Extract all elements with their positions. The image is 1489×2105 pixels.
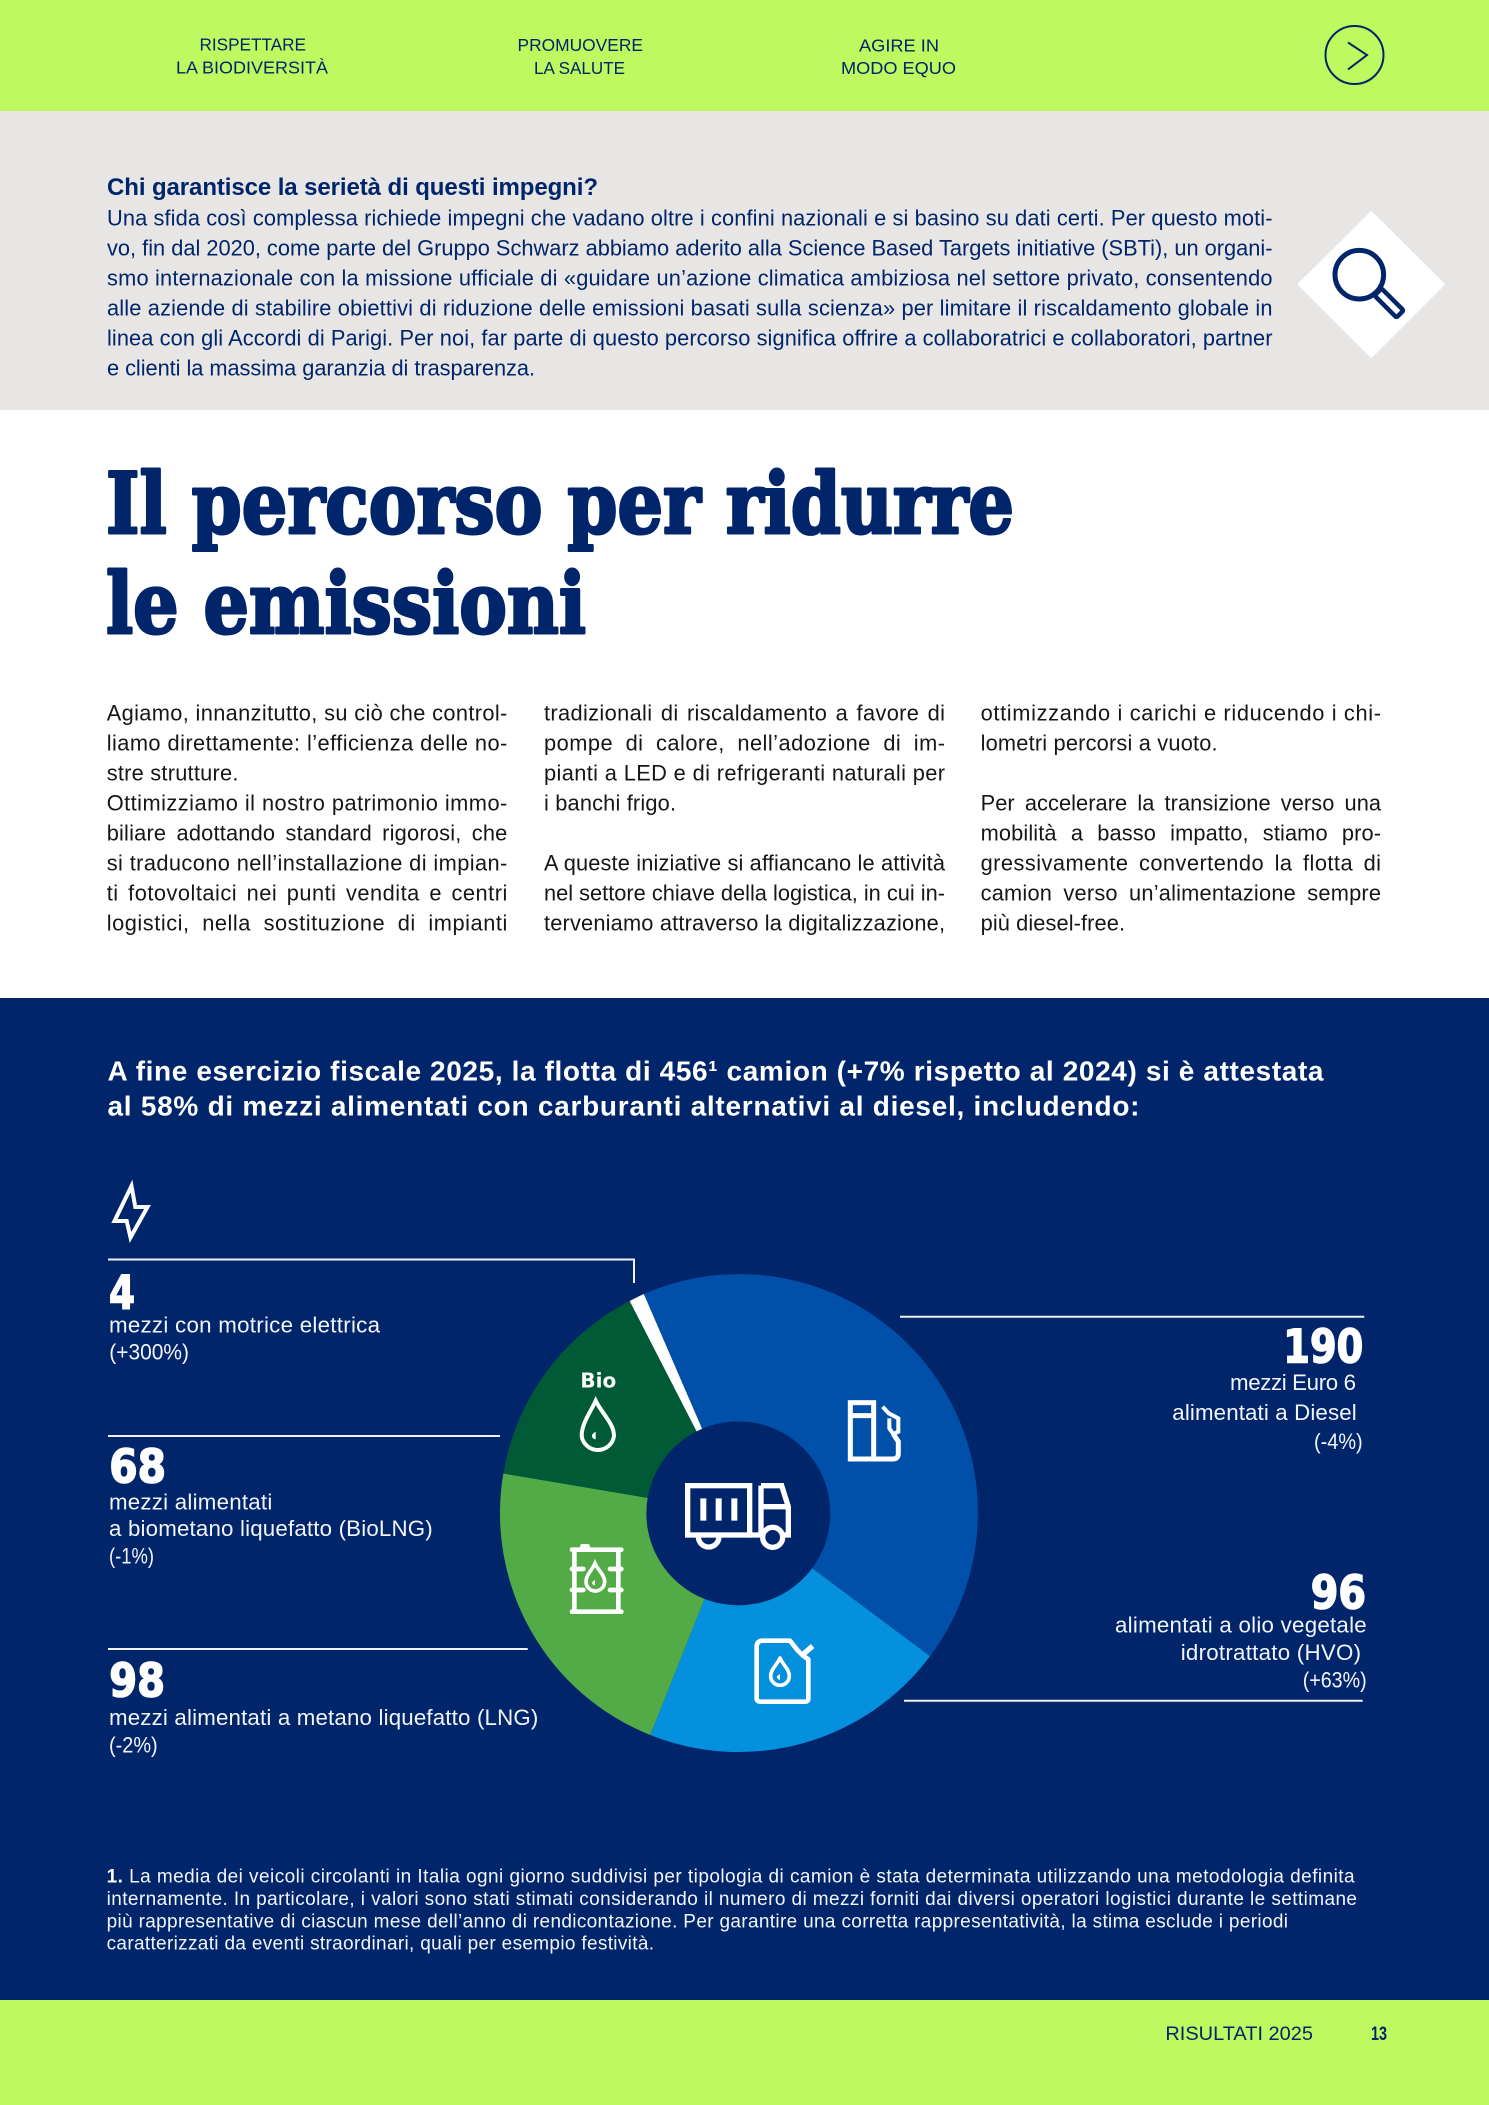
icon: truck [688, 1486, 788, 1547]
panel body text: linea con gli Accordi di Parigi. Per noi, far parte di questo percorso significa offrire a collaboratrici e collaboratori, partner [107, 326, 1272, 351]
text column 3: ottimizzando i carichi e riducendo i chi- [981, 701, 1381, 726]
panel body text: smo internazionale con la missione ufficiale di «guidare un’azione climatica ambiziosa nel settore privato, consentendo [107, 266, 1272, 291]
text column 2: terveniamo attraverso la digitalizzazione, [544, 910, 945, 935]
nav item: promuovere la salute [518, 35, 643, 78]
callout: BioLNG trucks: a biometano liquefatto (BioLNG) [109, 1516, 433, 1541]
segment: diesel Euro 6 [644, 1274, 978, 1656]
text column 1: ti fotovoltaici nei punti vendita e centri [107, 880, 507, 905]
text column 1: biliare adottando standard rigorosi, che [107, 820, 507, 845]
callout: electric trucks: (+300%) [109, 1339, 189, 1364]
text column 3: camion verso un’alimentazione sempre [981, 880, 1381, 905]
callout: HVO trucks [904, 1565, 1367, 1701]
nav item: rispettare la biodiversità: LA BIODIVERSITÀ [176, 58, 328, 78]
callout: BioLNG trucks [108, 1436, 500, 1568]
nav item: rispettare la biodiversità: RISPETTARE [200, 35, 306, 55]
callout: BioLNG trucks: mezzi alimentati [109, 1489, 272, 1514]
panel heading: Chi garantisce la serietà di questi impegni? [107, 174, 598, 201]
text column 1: si traducono nell’installazione di impian- [107, 850, 507, 875]
nav item: agire in modo equo [841, 36, 956, 78]
text column 3: gressivamente convertendo la flotta di [981, 850, 1381, 875]
text column 1: stre strutture. [107, 760, 238, 785]
segment: BioLNG [503, 1301, 739, 1513]
callout: electric trucks: mezzi con motrice elettrica [109, 1313, 381, 1338]
panel body text: Una sfida così complessa richiede impegni che vadano oltre i confini nazionali e si basino su dati certi. Per questo moti- [107, 206, 1272, 231]
icon: lightning bolt [114, 1186, 148, 1238]
footnote: internamente. In particolare, i valori sono stati stimati considerando il numero di mezzi forniti dai diversi operatori logistici durante le settimane [107, 1889, 1357, 1910]
text column 2: pompe di calore, nell’adozione di im- [544, 730, 945, 756]
text column 1: Ottimizziamo il nostro patrimonio immo- [107, 790, 507, 815]
callout: Euro 6 diesel trucks: alimentati a Diesel [1172, 1400, 1357, 1425]
footer label: RISULTATI 2025 [1165, 2024, 1313, 2045]
callout: HVO trucks: alimentati a olio vegetale [1115, 1613, 1367, 1638]
nav item: promuovere la salute: PROMUOVERE [518, 35, 643, 55]
nav item: rispettare la biodiversità [176, 35, 328, 78]
callout: LNG trucks: (-2%) [109, 1733, 158, 1758]
donut hole [646, 1421, 830, 1605]
panel body text: vo, fin dal 2020, come parte del Gruppo Schwarz abbiamo aderito alla Science Based Targets initiative (SBTi), un organi- [107, 236, 1272, 261]
text column 1: logistici, nella sostituzione di impianti [107, 910, 507, 935]
fleet heading: al 58% di mezzi alimentati con carburanti alternativi al diesel, includendo: [108, 1090, 1140, 1122]
panel body text [107, 206, 1272, 381]
panel body text: alle aziende di stabilire obiettivi di riduzione delle emissioni basati sulla scienza» per limitare il riscaldamento globale in [107, 296, 1272, 321]
fleet heading: A fine esercizio fiscale 2025, la flotta di 456¹ camion (+7% rispetto al 2024) si è attestata [108, 1056, 1324, 1086]
text column 2: A queste iniziative si affiancano le attività [544, 850, 946, 875]
icon: oil barrel [572, 1546, 621, 1612]
callout: LNG trucks: 98 [109, 1654, 165, 1708]
panel body text: e clienti la massima garanzia di trasparenza. [107, 356, 535, 381]
callout: LNG trucks [108, 1649, 538, 1758]
text column 2: tradizionali di riscaldamento a favore di [544, 701, 945, 726]
footer band [0, 2000, 1489, 2105]
panel: who guarantees the commitments [0, 111, 1489, 410]
text column 1: Agiamo, innanzitutto, su ciò che control- [107, 701, 507, 726]
text column 2: i banchi frigo. [544, 790, 676, 815]
text column 3 [981, 701, 1382, 935]
nav item: promuovere la salute: LA SALUTE [534, 58, 625, 78]
text column 1 [107, 701, 507, 935]
nav item: agire in modo equo: MODO EQUO [841, 58, 956, 78]
footnote: 1. La media dei veicoli circolanti in Italia ogni giorno suddivisi per tipologia di camion è stata determinata utilizzando una metodologia definita [107, 1866, 1355, 1887]
callout: Euro 6 diesel trucks: 190 [1283, 1320, 1363, 1374]
callout: HVO trucks: idrotrattato (HVO) [1181, 1640, 1361, 1665]
text column 3: Per accelerare la transizione verso una [981, 790, 1382, 815]
text column 1: liamo direttamente: l’efficienza delle no- [107, 730, 507, 756]
footnote: più rappresentative di ciascun mese dell’anno di rendicontazione. Per garantire una corretta rappresentatività, la stima esclude i periodi [107, 1912, 1288, 1932]
icon: magnifying glass on white diamond [1297, 211, 1445, 358]
icon: bio drop [580, 1368, 616, 1450]
fleet heading [108, 1056, 1324, 1122]
callout: Euro 6 diesel trucks [900, 1317, 1364, 1454]
callout: LNG trucks: mezzi alimentati a metano liquefatto (LNG) [109, 1705, 538, 1730]
icon: bio drop: Bio [580, 1368, 616, 1392]
callout: Euro 6 diesel trucks: mezzi Euro 6 [1230, 1370, 1356, 1395]
text column 2 [544, 701, 946, 935]
title: Il percorso per ridurre [106, 454, 1014, 553]
nav item: agire in modo equo: AGIRE IN [859, 36, 939, 56]
segment: electric [630, 1294, 739, 1513]
title: le emissioni [106, 554, 586, 653]
panel: truck fleet [0, 998, 1489, 2000]
icon: next arrow in circle [1326, 26, 1384, 84]
top navigation band [0, 0, 1489, 111]
callout: HVO trucks: 96 [1311, 1565, 1366, 1619]
title [106, 454, 1014, 653]
icon: fuel pump [850, 1403, 898, 1459]
text column 3: più diesel-free. [981, 910, 1125, 935]
callout: BioLNG trucks: 68 [109, 1440, 166, 1494]
text column 2: pianti a LED e di refrigeranti naturali per [544, 760, 945, 785]
footnote [107, 1866, 1357, 1954]
text column 3: mobilità a basso impatto, stiamo pro- [981, 820, 1381, 845]
footnote: caratterizzati da eventi straordinari, quali per esempio festività. [107, 1933, 654, 1954]
callout: HVO trucks: (+63%) [1303, 1668, 1367, 1693]
segment: LNG [500, 1473, 739, 1735]
callout: electric trucks: 4 [109, 1265, 135, 1319]
donut chart: fleet by fuel [500, 1274, 978, 1752]
text column 2: nel settore chiave della logistica, in cui in- [544, 880, 945, 905]
callout: BioLNG trucks: (-1%) [109, 1543, 154, 1568]
icon: jerrycan [757, 1641, 813, 1702]
page number: 13 [1371, 2024, 1387, 2045]
callout: electric trucks [108, 1260, 634, 1364]
segment: HVO [650, 1513, 930, 1752]
callout: Euro 6 diesel trucks: (-4%) [1314, 1429, 1363, 1454]
text column 3: lometri percorsi a vuoto. [981, 730, 1218, 756]
